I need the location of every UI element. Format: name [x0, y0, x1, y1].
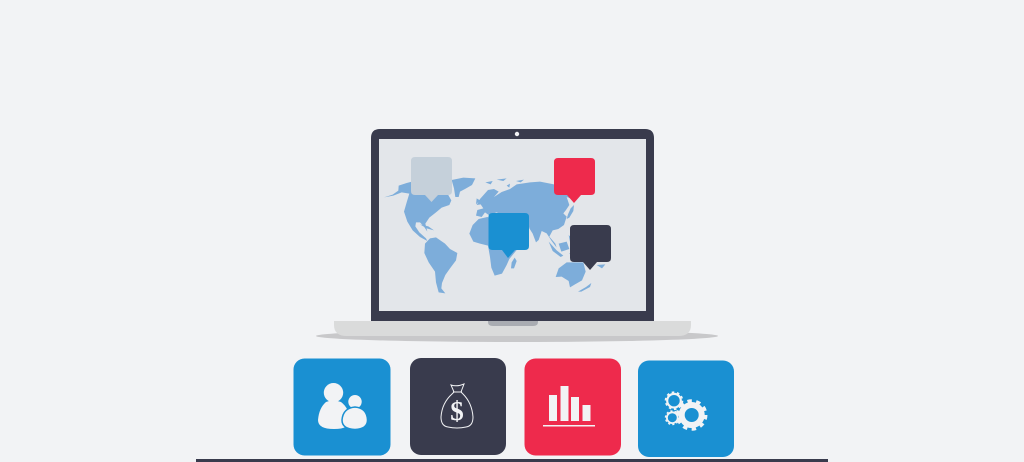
- laptop screen: [379, 139, 646, 311]
- north america: [384, 182, 451, 241]
- icon: gears: [666, 392, 706, 429]
- africa: [469, 217, 527, 276]
- new zealand: [578, 283, 591, 292]
- australia: [556, 262, 586, 287]
- arctic islands: [476, 178, 524, 204]
- tile: chart: [524, 358, 621, 456]
- callout: grey: [411, 157, 452, 202]
- tile: people: [294, 358, 390, 456]
- callout: dark: [570, 225, 611, 270]
- laptop: [316, 129, 718, 342]
- japan: [567, 205, 574, 219]
- laptop notch: [488, 321, 538, 326]
- callout: blue: [488, 213, 529, 258]
- dollar sign: $: [450, 396, 464, 426]
- eurasia: [476, 182, 572, 248]
- icon: people: [318, 383, 368, 430]
- world map: [384, 178, 605, 293]
- madagascar: [511, 258, 517, 268]
- laptop lid: [371, 129, 654, 321]
- south america: [424, 237, 457, 293]
- tile: settings: [638, 360, 734, 457]
- laptop base: [334, 321, 691, 336]
- southeast asia islands: [549, 235, 605, 268]
- icon: bar chart: [543, 386, 595, 426]
- callout: red: [554, 158, 595, 203]
- tile: money: [410, 358, 506, 455]
- greenland: [452, 178, 475, 197]
- ground line: [196, 459, 828, 462]
- cuba: [420, 224, 434, 230]
- camera: [515, 132, 519, 136]
- laptop shadow: [316, 330, 718, 342]
